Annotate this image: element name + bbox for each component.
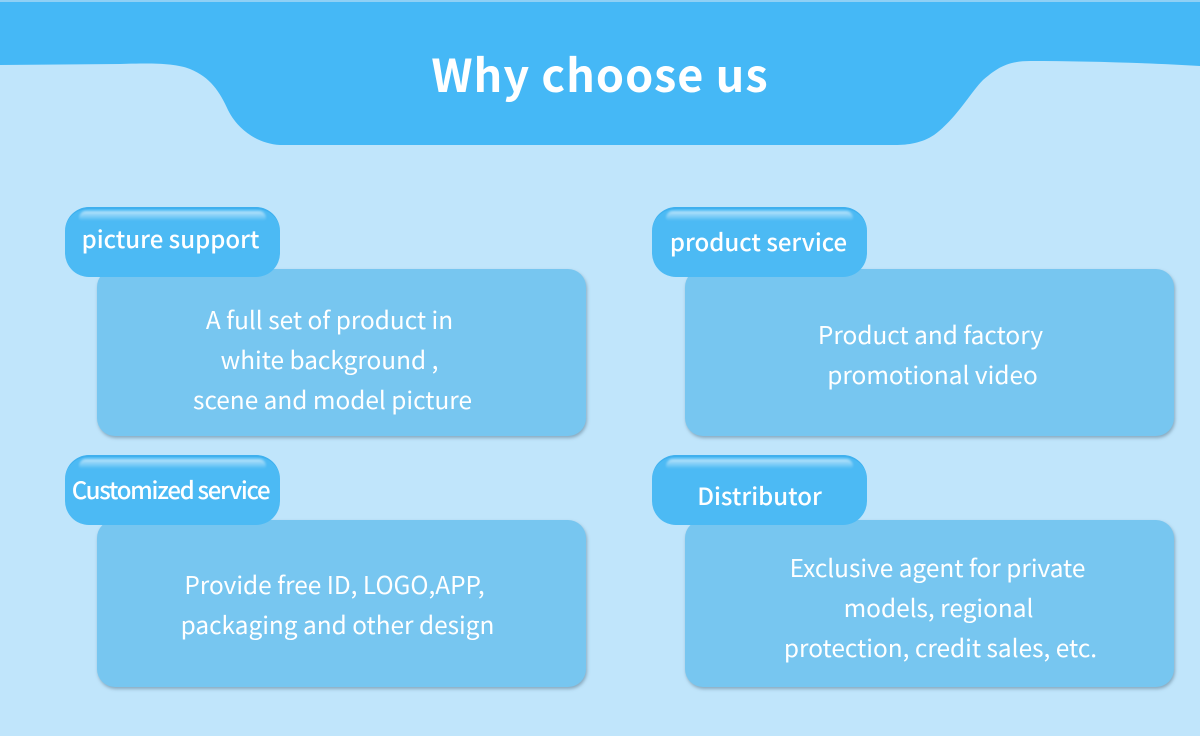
label: picture support [65,207,280,277]
panel: distributor: protection, credit sales, etc. [784,630,1097,665]
panel: product service [685,269,1174,436]
label: customized service [65,455,280,525]
header banner [0,0,1200,145]
panel: product service: promotional video [827,357,1038,392]
panel: customized service: packaging and other design [181,607,494,642]
label: product service [652,207,867,277]
panel: picture support: white background , [221,342,438,377]
panel: picture support: A full set of product in [206,302,453,337]
label: distributor [652,455,867,525]
label: picture support: picture support [82,220,259,255]
panel: product service: Product and factory [818,317,1043,352]
panel: customized service: Provide free ID, LOGO,APP, [184,567,485,602]
label: product service: product service [670,223,847,258]
panel: distributor [685,520,1174,687]
label: distributor: Distributor [697,477,822,512]
panel: distributor: Exclusive agent for private [790,550,1085,585]
panel: distributor: models, regional [844,590,1033,625]
title: Why choose us [431,40,769,105]
label: customized service: Customized service [72,471,269,506]
panel: picture support: scene and model picture [193,382,472,417]
panel: customized service [97,520,586,687]
panel: picture support [97,269,586,436]
